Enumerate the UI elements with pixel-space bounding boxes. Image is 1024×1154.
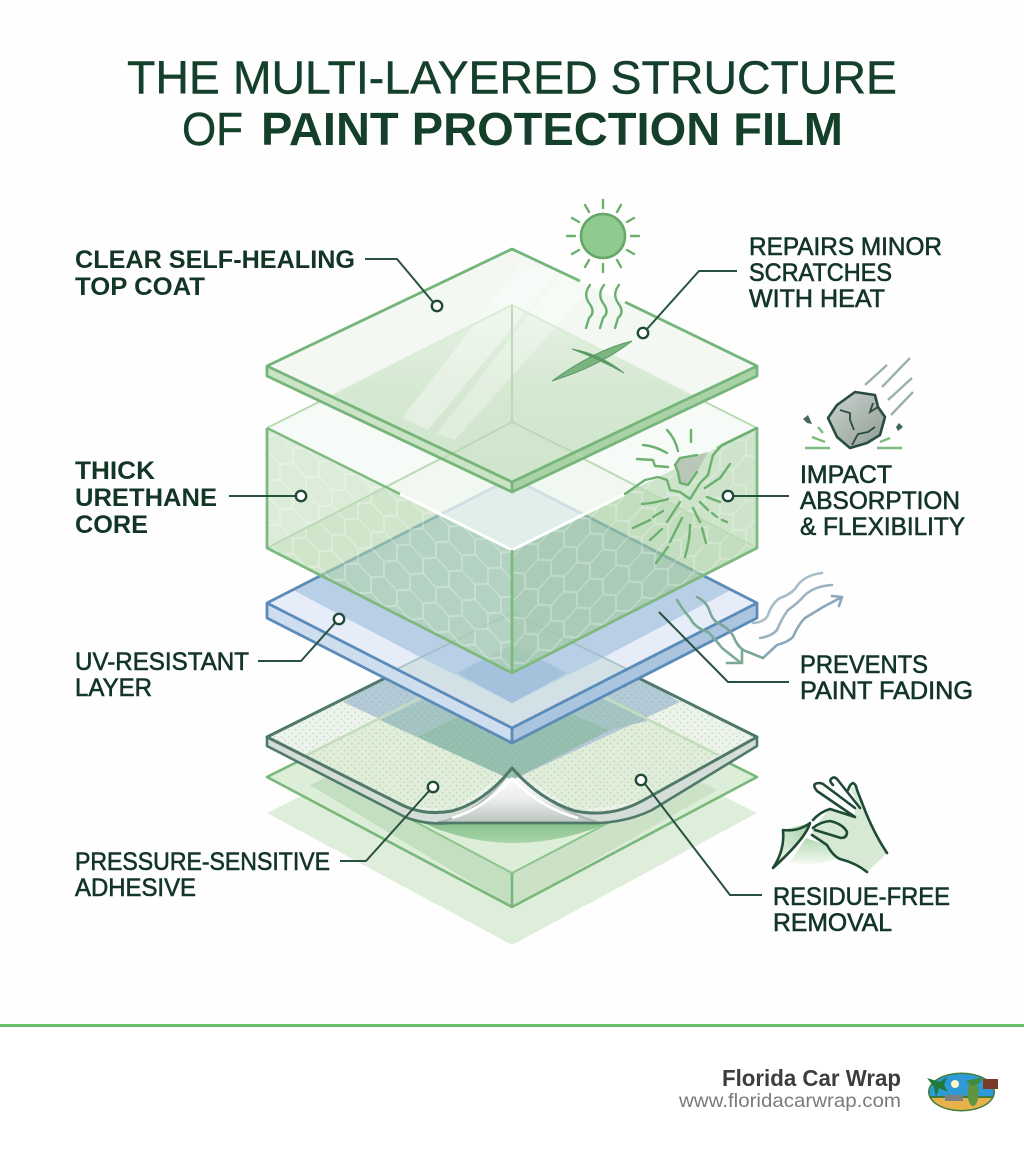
label: impact absorption: ABSORPTION [800, 487, 960, 515]
label: impact absorption: & FLEXIBILITY [800, 513, 965, 541]
icon: UV rays [677, 573, 842, 663]
thumb loop [813, 821, 847, 838]
hand palm fill [812, 787, 887, 872]
label: impact absorption [800, 461, 965, 541]
label: pressure-sensitive adhesive: ADHESIVE [75, 874, 196, 902]
core left face [267, 428, 512, 673]
glare stripes [402, 264, 560, 430]
ground shadow [267, 690, 757, 945]
hand outline [813, 778, 887, 853]
title: PAINT PROTECTION FILM [261, 103, 843, 155]
green crescent under peel [412, 818, 620, 843]
footer divider [0, 1024, 1024, 1027]
footer brand text [678, 1065, 901, 1112]
core right face [512, 428, 757, 673]
label: thick urethane core: CORE [75, 511, 148, 539]
leader lines [229, 259, 789, 895]
thick urethane core [267, 305, 757, 673]
label: residue-free removal [773, 883, 950, 937]
icon: rock [803, 358, 913, 448]
label: clear self-healing top coat: CLEAR SELF-HEALING [75, 246, 355, 274]
icon: heat waves [586, 285, 622, 328]
label: repairs minor scratches: SCRATCHES [749, 259, 892, 287]
UV-resistant layer [267, 478, 757, 743]
film outline [773, 823, 810, 868]
peeled underside [438, 770, 598, 822]
label: UV-resistant layer: UV-RESISTANT [75, 648, 249, 676]
label: repairs minor scratches: WITH HEAT [749, 285, 885, 313]
label: UV-resistant layer [75, 648, 249, 702]
adhesive edge thickness [267, 737, 757, 823]
UV bright bands [267, 590, 420, 669]
UV central band [397, 657, 627, 728]
core top face [267, 305, 757, 550]
label: thick urethane core [75, 457, 217, 539]
icon: hand peeling film [773, 778, 887, 872]
label: thick urethane core: URETHANE [75, 484, 217, 512]
footer brand text: www.floridacarwrap.com [678, 1090, 901, 1112]
title: OF [182, 103, 243, 155]
label: thick urethane core: THICK [75, 457, 155, 485]
footer brand text: Florida Car Wrap [722, 1065, 901, 1091]
label: pressure-sensitive adhesive [75, 848, 330, 902]
logo [925, 1072, 999, 1112]
label: impact absorption: IMPACT [800, 461, 892, 489]
title: THE MULTI-LAYERED STRUCTURE [127, 52, 897, 104]
label: repairs minor scratches [749, 233, 942, 313]
label: clear self-healing top coat [75, 246, 355, 301]
core floor [267, 422, 757, 673]
label: pressure-sensitive adhesive: PRESSURE-SENSITIVE [75, 848, 330, 876]
clear self-healing top coat sheet [267, 249, 757, 492]
base film sheet [267, 650, 757, 907]
label: residue-free removal: RESIDUE-FREE [773, 883, 950, 911]
label: UV-resistant layer: LAYER [75, 674, 152, 702]
label: residue-free removal: REMOVAL [773, 909, 892, 937]
label: clear self-healing top coat: TOP COAT [75, 273, 205, 301]
adhesive layer with peeled corner [267, 613, 757, 843]
label: prevents paint fading [800, 651, 973, 705]
peel highlight [452, 778, 578, 818]
scratch [552, 341, 632, 381]
impact crater and cracks [625, 428, 757, 563]
adhesive top surface [267, 615, 757, 813]
title [127, 52, 897, 155]
label: prevents paint fading: PAINT FADING [800, 677, 973, 705]
label: repairs minor scratches: REPAIRS MINOR [749, 233, 942, 261]
label: prevents paint fading: PREVENTS [800, 651, 928, 679]
icon: sun [567, 200, 639, 272]
